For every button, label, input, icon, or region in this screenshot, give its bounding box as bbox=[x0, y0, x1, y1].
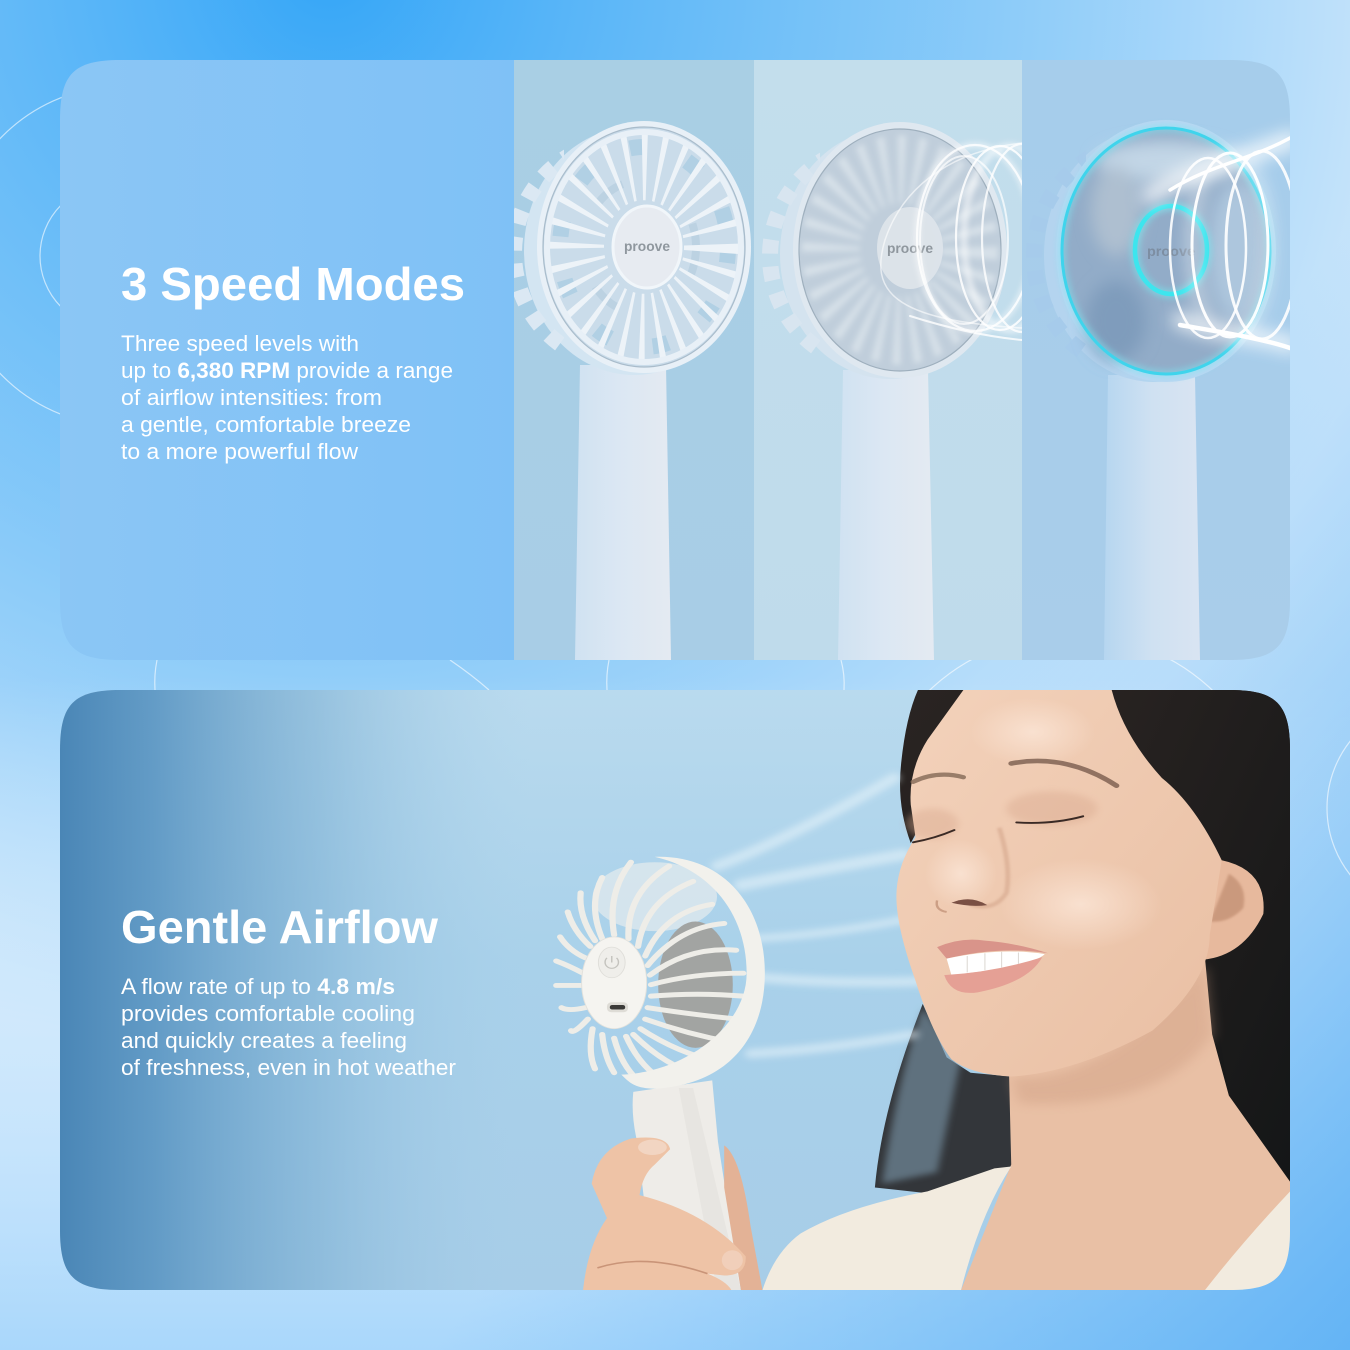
logo: proove: proove bbox=[887, 240, 933, 256]
smile bbox=[937, 940, 1048, 993]
text block: speed description: of airflow intensities: from bbox=[121, 385, 382, 410]
photo: fan at high speed with glowing rings bbox=[1022, 60, 1298, 660]
logo: proove: proove bbox=[624, 238, 670, 254]
photo: fan at medium speed bbox=[754, 60, 1022, 660]
photo: fan at low speed bbox=[514, 60, 754, 660]
heading: 3 Speed Modes: 3 Speed Modes bbox=[121, 258, 465, 310]
panel: 3 speed modes bbox=[60, 60, 1298, 660]
text block: speed description: up to 6,380 RPM provide a range bbox=[121, 358, 453, 383]
text block: airflow description: of freshness, even in hot weather bbox=[121, 1055, 456, 1080]
text block: speed description bbox=[121, 331, 453, 464]
text block: airflow description: provides comfortable cooling bbox=[121, 1001, 415, 1026]
shirt bbox=[762, 1166, 1290, 1290]
ear bbox=[1206, 860, 1264, 960]
text block: airflow description: A flow rate of up to 4.8 m/s bbox=[121, 974, 395, 999]
neck and chest bbox=[961, 958, 1290, 1290]
hand bbox=[583, 1137, 762, 1290]
text block: airflow description bbox=[121, 974, 456, 1080]
handheld fan bbox=[556, 857, 765, 1290]
heading: Gentle Airflow: Gentle Airflow bbox=[121, 901, 438, 953]
text block: speed description: to a more powerful flow bbox=[121, 439, 358, 464]
text block: speed description: Three speed levels with bbox=[121, 331, 359, 356]
airflow streaks bbox=[717, 778, 937, 1054]
photo: woman with handheld fan bbox=[556, 690, 1290, 1290]
nose bbox=[937, 828, 1008, 912]
eyebrows and eyes bbox=[913, 761, 1116, 842]
hair bbox=[875, 690, 1290, 1193]
text block: speed description: a gentle, comfortable breeze bbox=[121, 412, 411, 437]
logo: proove: proove bbox=[1147, 243, 1195, 259]
face bbox=[896, 690, 1222, 1077]
text block: airflow description: and quickly creates a feeling bbox=[121, 1028, 407, 1053]
panel: gentle airflow bbox=[60, 690, 1290, 1290]
